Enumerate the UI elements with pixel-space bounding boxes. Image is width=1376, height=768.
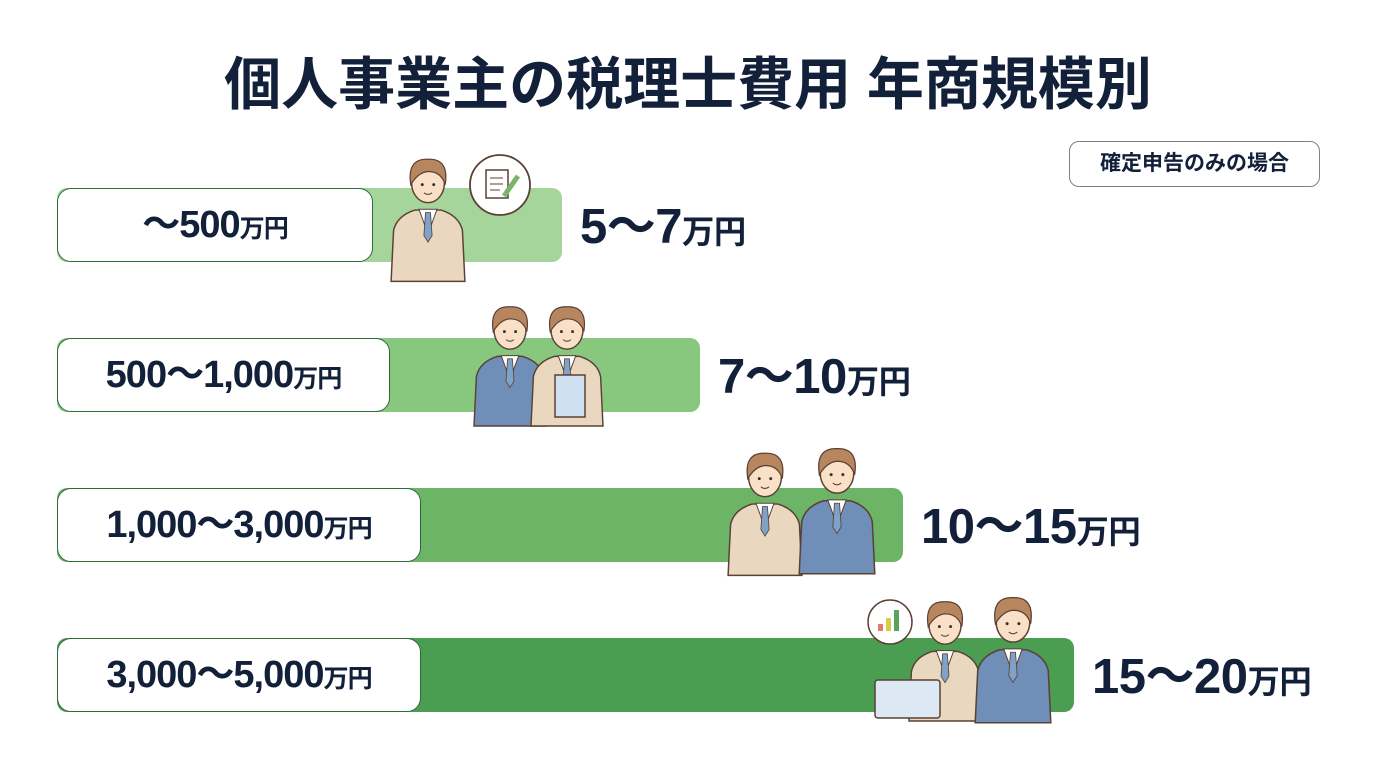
row 2 persons bbox=[474, 307, 603, 426]
row 2 label: 500〜1,000万円 bbox=[106, 354, 341, 396]
row 1 bar bbox=[57, 188, 562, 262]
badge: note bbox=[1069, 141, 1320, 187]
icon: laptop bbox=[875, 680, 940, 718]
icon: chart bubble bbox=[868, 600, 912, 644]
row 3 bar bbox=[57, 488, 903, 562]
icon: document bubble bbox=[470, 155, 530, 215]
row 3 label: 1,000〜3,000万円 bbox=[106, 504, 372, 546]
row 2 value: 7〜10万円 bbox=[718, 350, 910, 404]
row 4 value: 15〜20万円 bbox=[1092, 650, 1311, 704]
row 1 value: 5〜7万円 bbox=[580, 200, 746, 254]
row 4 label: 3,000〜5,000万円 bbox=[106, 654, 372, 696]
badge: note: 確定申告のみの場合 bbox=[1100, 152, 1289, 175]
row 2 bar bbox=[57, 338, 700, 412]
row 4 label bbox=[57, 638, 421, 712]
row 1 label bbox=[57, 188, 373, 262]
title: 個人事業主の税理士費用 年商規模別 bbox=[224, 53, 1152, 117]
row 2 label bbox=[57, 338, 390, 412]
row 1 label: 〜500万円 bbox=[142, 204, 288, 246]
row 3 persons bbox=[728, 449, 875, 575]
row 3 value: 10〜15万円 bbox=[921, 500, 1140, 554]
row 3 label bbox=[57, 488, 421, 562]
row 4 persons bbox=[868, 598, 1051, 723]
row 1 person bbox=[391, 155, 530, 281]
row 4 bar bbox=[57, 638, 1074, 712]
